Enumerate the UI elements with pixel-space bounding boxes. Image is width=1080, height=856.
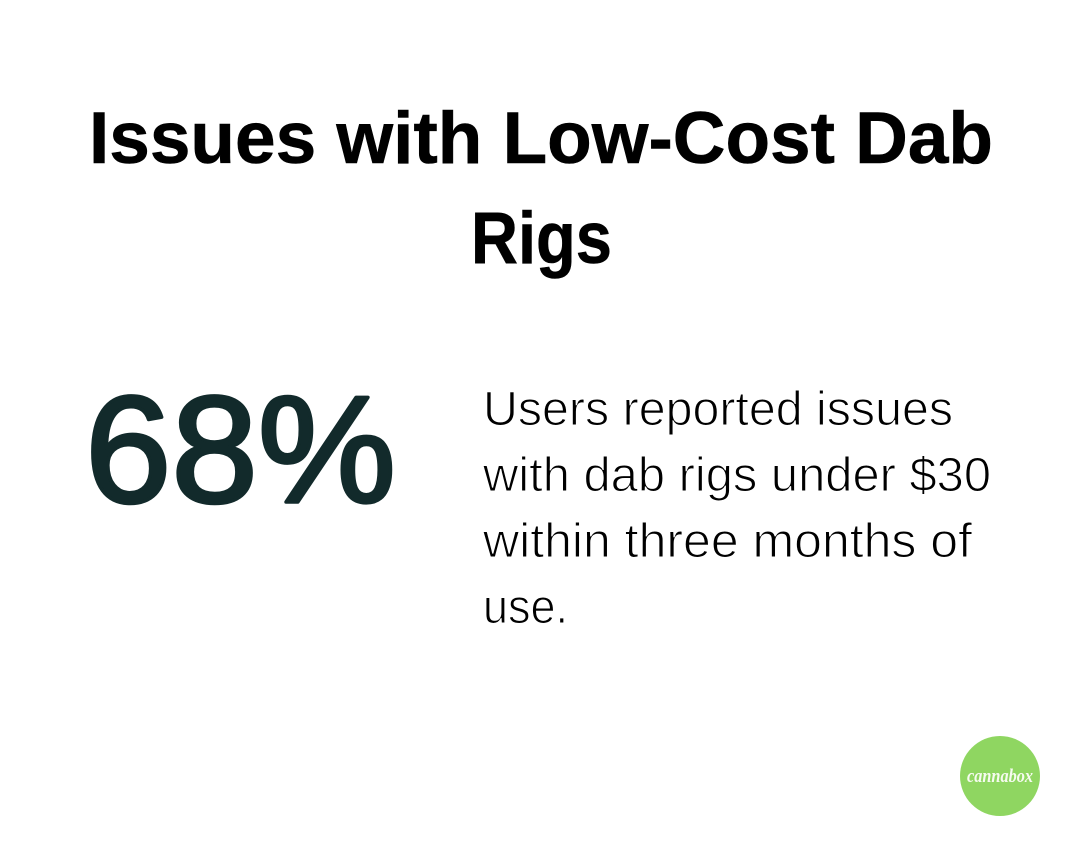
description text: [482, 383, 991, 634]
logo: cannabox badge: cannabox: [967, 766, 1033, 787]
title: Rigs: [471, 198, 612, 279]
title: [89, 98, 993, 279]
description text: with dab rigs under $30: [482, 449, 991, 502]
statistic: 68%: 68%: [85, 365, 396, 535]
title: Issues with Low-Cost Dab: [89, 98, 993, 179]
logo: cannabox badge: [960, 736, 1040, 816]
description text: use.: [483, 581, 568, 634]
description text: within three months of: [482, 515, 973, 568]
description text: Users reported issues: [483, 383, 953, 436]
